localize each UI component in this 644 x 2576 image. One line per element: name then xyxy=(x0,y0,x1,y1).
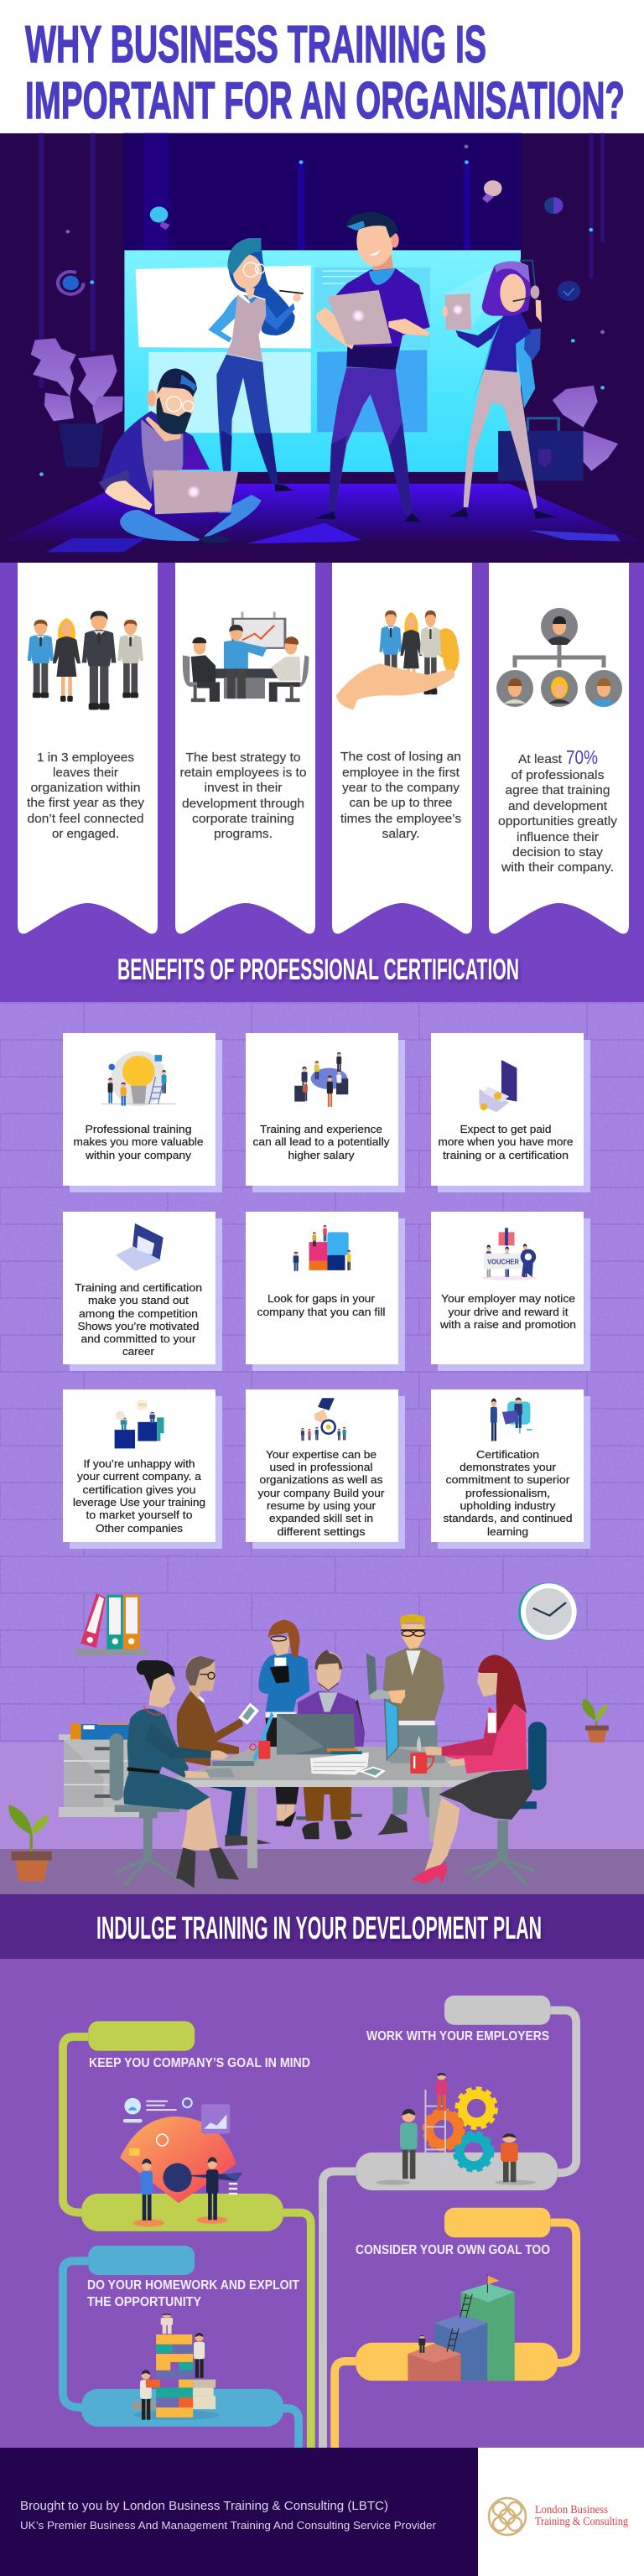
card text: row 1 xyxy=(74,1123,574,1161)
floor xyxy=(0,484,644,546)
icon: business handshake xyxy=(491,1398,532,1441)
card text: row 3: learning xyxy=(487,1525,528,1538)
text: ribbon 3: salary. xyxy=(382,827,419,841)
logo: knot emblem and wordmark: Training & Consulting xyxy=(535,2515,628,2527)
card text: row 3: different settings xyxy=(277,1525,366,1538)
text: ribbon 2: development through xyxy=(182,797,304,811)
icon: left plant xyxy=(31,338,123,467)
flow: yellow step xyxy=(335,2208,576,2448)
icon: ring gauge xyxy=(58,272,83,294)
card text: row 3: Your expertise can be xyxy=(266,1448,377,1461)
footer text xyxy=(20,2500,436,2532)
label: consider own goal: CONSIDER YOUR OWN GOAL TOO xyxy=(356,2243,550,2257)
card text: row 2: Training and certification xyxy=(75,1281,202,1294)
text: ribbon 4: agree that training xyxy=(505,783,610,797)
text: ribbon 2: The best strategy to xyxy=(186,750,300,765)
filing cabinet with folders xyxy=(59,1723,140,1817)
card text: row 3: certification gives you xyxy=(82,1483,196,1496)
icon: building block tower xyxy=(132,2314,220,2420)
icon: left potted plant xyxy=(8,1805,52,1882)
card text: row 2: with a raise and promotion xyxy=(439,1318,576,1331)
flow: green step xyxy=(63,2021,311,2448)
seated man in purple xyxy=(296,1649,365,1840)
text: ribbon 3 xyxy=(340,750,461,841)
card text: row 1: more when you have more xyxy=(438,1135,574,1148)
card text: row 3: expanded skill set in xyxy=(269,1512,373,1524)
footer text: Brought to you by London Business Training & Consulting (LBTC) xyxy=(20,2500,388,2513)
icon: voucher reward xyxy=(481,1228,537,1280)
icon: voucher reward: VOUCHER xyxy=(487,1258,519,1265)
panel: ribbon 2 xyxy=(175,563,315,934)
label: keep goal: KEEP YOU COMPANY’S GOAL IN MIND xyxy=(89,2056,310,2070)
card text: row 3: leverage Use your training xyxy=(73,1496,205,1509)
card text: row 2: Your employer may notice xyxy=(441,1292,575,1305)
card text: row 2: Shows you’re motivated xyxy=(77,1320,200,1332)
woman with pen xyxy=(208,238,304,491)
office meeting illustration xyxy=(8,1583,609,1888)
table, center and right xyxy=(296,1614,444,1840)
text: ribbon 4: of professionals xyxy=(512,768,604,782)
text: ribbon 1 xyxy=(27,750,145,841)
card text: row 1: Professional training xyxy=(86,1123,191,1135)
text: ribbon 4 xyxy=(498,746,618,875)
text: ribbon 2: programs. xyxy=(214,827,273,841)
icon: unhappy at work desks xyxy=(115,1400,164,1448)
card text: row 3: upholding industry xyxy=(460,1499,556,1512)
standing man in olive xyxy=(366,1614,444,1835)
table back portion and colleagues xyxy=(177,1620,309,1846)
card text: row 1: higher salary xyxy=(288,1149,355,1161)
card text: row 2: career xyxy=(122,1345,155,1358)
card text: row 1: Training and experience xyxy=(260,1123,382,1135)
woman with tablet and headset xyxy=(443,261,556,518)
text: ribbon 4: 70% xyxy=(566,746,598,768)
label: homework: DO YOUR HOMEWORK AND EXPLOIT xyxy=(87,2278,299,2293)
card text: row 1: Expect to get paid xyxy=(460,1123,552,1135)
card text: row 3: to market yourself to xyxy=(86,1509,193,1521)
woman in pink, seated right xyxy=(413,1654,547,1885)
title xyxy=(25,16,625,130)
text: ribbon 4: with their company. xyxy=(501,860,614,875)
text: ribbon 4: and development xyxy=(508,799,608,813)
icon: light bulb team xyxy=(101,1051,175,1106)
icon: hand holding employees and coins xyxy=(336,610,460,709)
text: ribbon 1: don’t feel connected xyxy=(27,812,144,826)
text: ribbon 1: or engaged. xyxy=(52,827,119,841)
brick wall background xyxy=(0,1002,644,1742)
card icons xyxy=(101,1051,537,1448)
icon: right plant and briefcase xyxy=(498,386,618,480)
icon: meeting with chart board xyxy=(183,612,309,702)
card text: row 2: and committed to your xyxy=(80,1332,196,1345)
card text: row 3 xyxy=(73,1448,572,1538)
card text: row 3: Other companies xyxy=(96,1522,184,1535)
icon: magnifier over candidates xyxy=(301,1398,346,1441)
section: statistics ribbons xyxy=(0,563,644,1002)
card text: row 2: Look for gaps in your xyxy=(267,1292,376,1305)
panel: ribbon 1 xyxy=(18,563,158,934)
icon: floating bulb cyan xyxy=(150,206,170,230)
text: ribbon 3: year to the company xyxy=(342,781,460,795)
card text: row 2 xyxy=(75,1281,576,1358)
text: ribbon 1: the first year as they xyxy=(27,796,145,810)
text: ribbon 4: influence their xyxy=(517,830,599,844)
card text: row 3: If you’re unhappy with xyxy=(84,1457,195,1470)
logo: knot emblem and wordmark xyxy=(489,2498,628,2535)
seated man in brown xyxy=(177,1656,271,1846)
panel grid: benefit cards xyxy=(63,1033,590,1549)
card text: row 3: professionalism, xyxy=(465,1487,550,1499)
man sitting with laptop xyxy=(98,368,262,543)
footer xyxy=(0,2448,644,2576)
icon: goal steps with flag xyxy=(408,2275,515,2381)
icon: org chart xyxy=(496,608,622,707)
heading band: indulge training xyxy=(0,1894,644,1959)
text: ribbon 3: can be up to three xyxy=(349,796,453,810)
man with laptop, standing xyxy=(314,212,430,522)
flow: blue step xyxy=(63,2246,299,2448)
card text: row 2: company that you can fill xyxy=(257,1306,386,1318)
floor xyxy=(0,1742,644,1894)
text: ribbon 3: times the employee’s xyxy=(340,812,461,826)
text: ribbon 1: leaves their xyxy=(53,766,118,780)
meeting table with laptops and papers xyxy=(168,1700,490,1868)
card text: row 2: make you stand out xyxy=(88,1294,189,1306)
card text: row 3: Certification xyxy=(476,1448,539,1461)
icon: wall clock xyxy=(518,1583,577,1641)
text: ribbon 3: The cost of losing an xyxy=(340,750,461,764)
icon: check badge xyxy=(558,281,580,301)
wall screen xyxy=(124,250,521,472)
text: ribbon 1: 1 in 3 employees xyxy=(37,750,134,765)
laptop: right and mug xyxy=(385,1700,446,1774)
icon: team round table xyxy=(294,1052,348,1107)
panel: ribbon 4 xyxy=(489,563,629,934)
text: ribbon 4: At least xyxy=(518,752,563,766)
logo: knot emblem and wordmark: London Business xyxy=(535,2503,608,2516)
card text: row 3: organizations as well as xyxy=(260,1473,383,1486)
card text: row 3: your company Build your xyxy=(258,1487,385,1499)
text: ribbon 4: decision to stay xyxy=(512,845,604,860)
icon: four employees xyxy=(28,610,143,709)
label: homework: THE OPPORTUNITY xyxy=(87,2295,202,2309)
card text: row 1: makes you more valuable xyxy=(74,1135,203,1148)
laptop: left xyxy=(204,1712,274,1777)
text: ribbon 2: corporate training xyxy=(192,812,294,826)
icon: gears and workers xyxy=(376,2073,536,2185)
laptop: center and papers xyxy=(277,1714,386,1778)
flow: gray step xyxy=(323,1996,576,2448)
icon: company goal target xyxy=(120,2095,242,2226)
card text: row 1: training or a certification xyxy=(443,1149,569,1161)
text: ribbon 4: opportunities greatly xyxy=(498,814,618,828)
text: ribbon 3: employee in the first xyxy=(342,766,460,780)
card text: row 1: can all lead to a potentially xyxy=(253,1135,390,1148)
icon: floating bulb pink xyxy=(482,180,502,203)
hero illustration: team at a presentation screen xyxy=(0,133,644,563)
card text: row 2: among the competition xyxy=(79,1307,198,1320)
card text: row 3: used in professional xyxy=(270,1461,373,1473)
label: homework xyxy=(87,2278,299,2309)
text: ribbon 2: retain employees is to xyxy=(179,766,307,780)
text: ribbon 2: invest in their xyxy=(205,781,283,795)
woman in teal, seated left xyxy=(110,1660,239,1888)
card text: row 2: your drive and reward it xyxy=(448,1306,569,1318)
section: development plan xyxy=(0,1959,644,2448)
card text: row 3: standards, and continued xyxy=(443,1512,572,1524)
label: work with employers: WORK WITH YOUR EMPLOYERS xyxy=(366,2029,549,2044)
icon: unhappy at work desks: ??? xyxy=(138,1404,147,1409)
card text: row 3: demonstrates your xyxy=(460,1461,557,1473)
text: ribbon 1: organization within xyxy=(30,781,141,795)
icon: laptop certificate xyxy=(116,1223,164,1271)
icon: puzzle team xyxy=(293,1225,351,1271)
card text: row 3: your current company. a xyxy=(77,1470,202,1483)
panel: ribbon 3 xyxy=(332,563,472,934)
card text: row 3: resume by using your xyxy=(267,1499,377,1512)
icon: phone and money xyxy=(479,1060,517,1112)
icon: right plant xyxy=(582,1698,609,1742)
shelf with binders xyxy=(75,1593,148,1655)
icon: pie badge xyxy=(544,197,564,214)
text: ribbon 2 xyxy=(179,750,307,841)
card text: row 3: commitment to superior xyxy=(446,1473,570,1486)
standing woman in blue xyxy=(258,1620,309,1826)
footer text: UK’s Premier Business And Management Training And Consulting Service Provider xyxy=(20,2520,436,2532)
card text: row 1: within your company xyxy=(85,1149,192,1161)
